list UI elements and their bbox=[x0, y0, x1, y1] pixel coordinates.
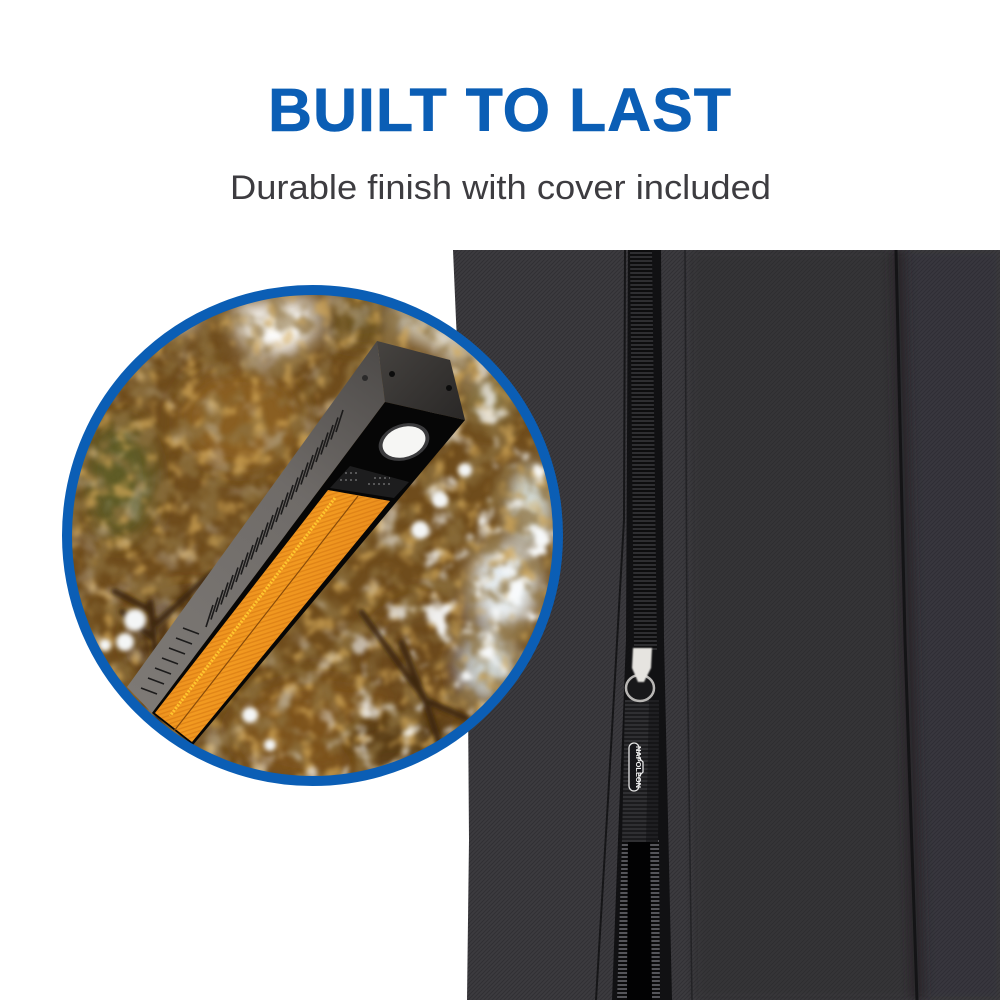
panel: zippered protective cover bbox=[440, 250, 1000, 1000]
brand tag bbox=[629, 743, 643, 791]
zipper ring bbox=[626, 675, 654, 701]
cap screws bbox=[389, 371, 452, 391]
zipper teeth lower bbox=[617, 840, 628, 1000]
seam fold line bbox=[896, 250, 917, 1000]
heater end cap bbox=[377, 341, 465, 420]
blue circle ring bbox=[67, 290, 558, 781]
zipper flap stitching bbox=[685, 250, 692, 1000]
vent slots bbox=[141, 410, 343, 694]
panel: heater photo in circle bbox=[60, 280, 570, 790]
light lens bbox=[378, 423, 430, 461]
control plate bbox=[330, 466, 409, 498]
cover fold shading bbox=[881, 250, 930, 1000]
pull strap bbox=[622, 700, 659, 842]
open zipper gap bbox=[627, 840, 652, 1000]
heater side panel bbox=[127, 341, 385, 713]
title: BUILT TO LAST bbox=[268, 76, 731, 144]
zipper track band bbox=[612, 250, 672, 1000]
trunk and branches bbox=[108, 566, 472, 744]
zipper teeth upper bbox=[630, 250, 657, 650]
zipper slider bbox=[632, 648, 652, 682]
heater underside bbox=[152, 402, 465, 745]
tree background bbox=[72, 295, 553, 776]
glowing heating element bbox=[155, 490, 390, 742]
subtitle: Durable finish with cover included bbox=[230, 169, 771, 207]
brand tag: NAPOLEON bbox=[634, 746, 641, 788]
